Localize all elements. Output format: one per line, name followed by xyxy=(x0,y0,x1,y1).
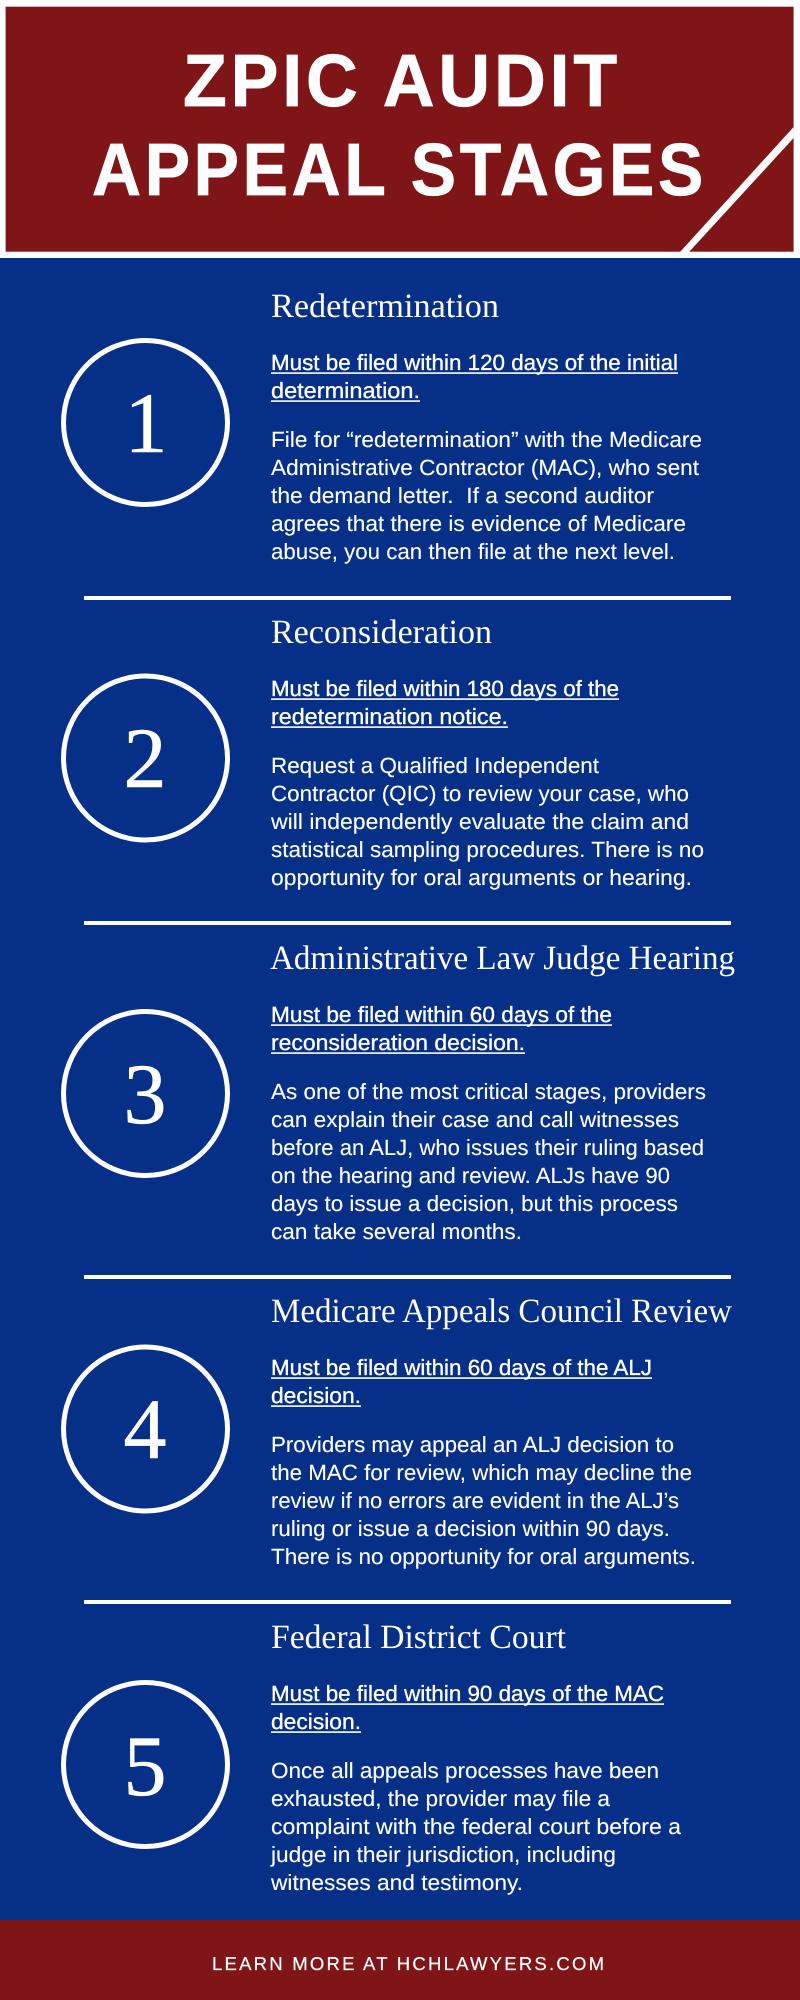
body text 4: ruling or issue a decision within 90 days. xyxy=(271,1516,670,1541)
body text 3: can explain their case and call witnesses xyxy=(271,1107,679,1132)
icon: number 2 circle xyxy=(64,676,228,840)
body text 1: the demand letter. If a second auditor xyxy=(271,483,654,508)
body text 2: statistical sampling procedures. There is no xyxy=(271,837,704,862)
body text 3: on the hearing and review. ALJs have 90 xyxy=(271,1163,670,1188)
panel: stage 4 medicare appeals council review xyxy=(64,1293,732,1569)
body text 5: judge in their jurisdiction, including xyxy=(270,1842,616,1867)
body text 2: Contractor (QIC) to review your case, who xyxy=(271,781,689,806)
body text 1 xyxy=(271,427,702,564)
filing deadline 4 xyxy=(271,1355,652,1408)
body text 5: Once all appeals processes have been xyxy=(271,1758,659,1783)
filing deadline 3 xyxy=(271,1002,612,1055)
panel: stage 2 reconsideration xyxy=(64,614,704,890)
filing deadline 5: Must be filed within 90 days of the MAC xyxy=(271,1681,664,1706)
body text 5 xyxy=(270,1758,682,1895)
body text 1: abuse, you can then file at the next level. xyxy=(271,539,675,564)
body text 4: the MAC for review, which may decline the xyxy=(271,1460,692,1485)
footer call to action: LEARN MORE AT HCHLAWYERS.COM xyxy=(212,1953,604,1974)
footer band xyxy=(0,1920,800,2000)
panel: stage 1 redetermination xyxy=(64,288,702,564)
heading: reconsideration: Reconsideration xyxy=(271,614,492,651)
icon: number 3 circle xyxy=(64,1012,228,1176)
icon: number 5 circle: 5 xyxy=(124,1718,166,1814)
panel: stage 5 federal district court xyxy=(64,1619,682,1895)
filing deadline 3: reconsideration decision. xyxy=(271,1030,525,1055)
filing deadline 2: redetermination notice. xyxy=(271,704,508,729)
filing deadline 1: Must be filed within 120 days of the initial xyxy=(271,350,678,375)
filing deadline 2 xyxy=(271,676,619,729)
filing deadline 2: Must be filed within 180 days of the xyxy=(271,676,619,701)
heading: medicare appeals council review: Medicare Appeals Council Review xyxy=(271,1293,732,1330)
body text 3 xyxy=(271,1079,706,1244)
body text 2: Request a Qualified Independent xyxy=(271,753,599,778)
body text 2 xyxy=(270,753,704,890)
body text 1: File for “redetermination” with the Medicare xyxy=(271,427,702,452)
title xyxy=(92,39,707,211)
heading: redetermination: Redetermination xyxy=(271,288,499,325)
icon: number 1 circle: 1 xyxy=(124,375,168,471)
body text 2: opportunity for oral arguments or hearing. xyxy=(271,865,692,890)
body text 4 xyxy=(271,1432,696,1569)
title: ZPIC AUDIT xyxy=(183,39,621,122)
filing deadline 1 xyxy=(271,350,678,403)
filing deadline 5: decision. xyxy=(271,1709,361,1734)
filing deadline 4: Must be filed within 60 days of the ALJ xyxy=(271,1355,652,1380)
body text 3: days to issue a decision, but this process xyxy=(271,1191,678,1216)
icon: number 2 circle: 2 xyxy=(124,710,166,806)
body text 4: Providers may appeal an ALJ decision to xyxy=(271,1432,674,1457)
panel: stage 3 administrative law judge hearing xyxy=(64,940,735,1244)
filing deadline 4: decision. xyxy=(271,1383,361,1408)
body text 3: before an ALJ, who issues their ruling based xyxy=(271,1135,704,1160)
icon: number 3 circle: 3 xyxy=(124,1046,166,1142)
icon: number 4 circle: 4 xyxy=(124,1381,166,1477)
heading: administrative law judge hearing: Administrative Law Judge Hearing xyxy=(270,940,735,977)
header banner xyxy=(6,7,794,252)
body text 1: Administrative Contractor (MAC), who sent xyxy=(271,455,699,480)
body text 5: exhausted, the provider may file a xyxy=(271,1786,611,1811)
filing deadline 1: determination. xyxy=(271,378,420,403)
icon: number 1 circle xyxy=(64,340,228,504)
body text 4: review if no errors are evident in the ALJ’s xyxy=(271,1488,679,1513)
heading: federal district court: Federal District Court xyxy=(271,1619,567,1656)
title: APPEAL STAGES xyxy=(92,128,707,211)
filing deadline 3: Must be filed within 60 days of the xyxy=(271,1002,612,1027)
body text 2: will independently evaluate the claim and xyxy=(270,809,689,834)
icon: number 5 circle xyxy=(64,1682,228,1846)
body text 3: As one of the most critical stages, providers xyxy=(271,1079,706,1104)
body text 4: There is no opportunity for oral arguments. xyxy=(271,1544,696,1569)
body text 3: can take several months. xyxy=(271,1219,522,1244)
filing deadline 5 xyxy=(271,1681,664,1734)
body text 5: witnesses and testimony. xyxy=(270,1870,523,1895)
body text 5: complaint with the federal court before a xyxy=(271,1814,682,1839)
body text 1: agrees that there is evidence of Medicare xyxy=(271,511,686,536)
icon: number 4 circle xyxy=(64,1347,228,1511)
